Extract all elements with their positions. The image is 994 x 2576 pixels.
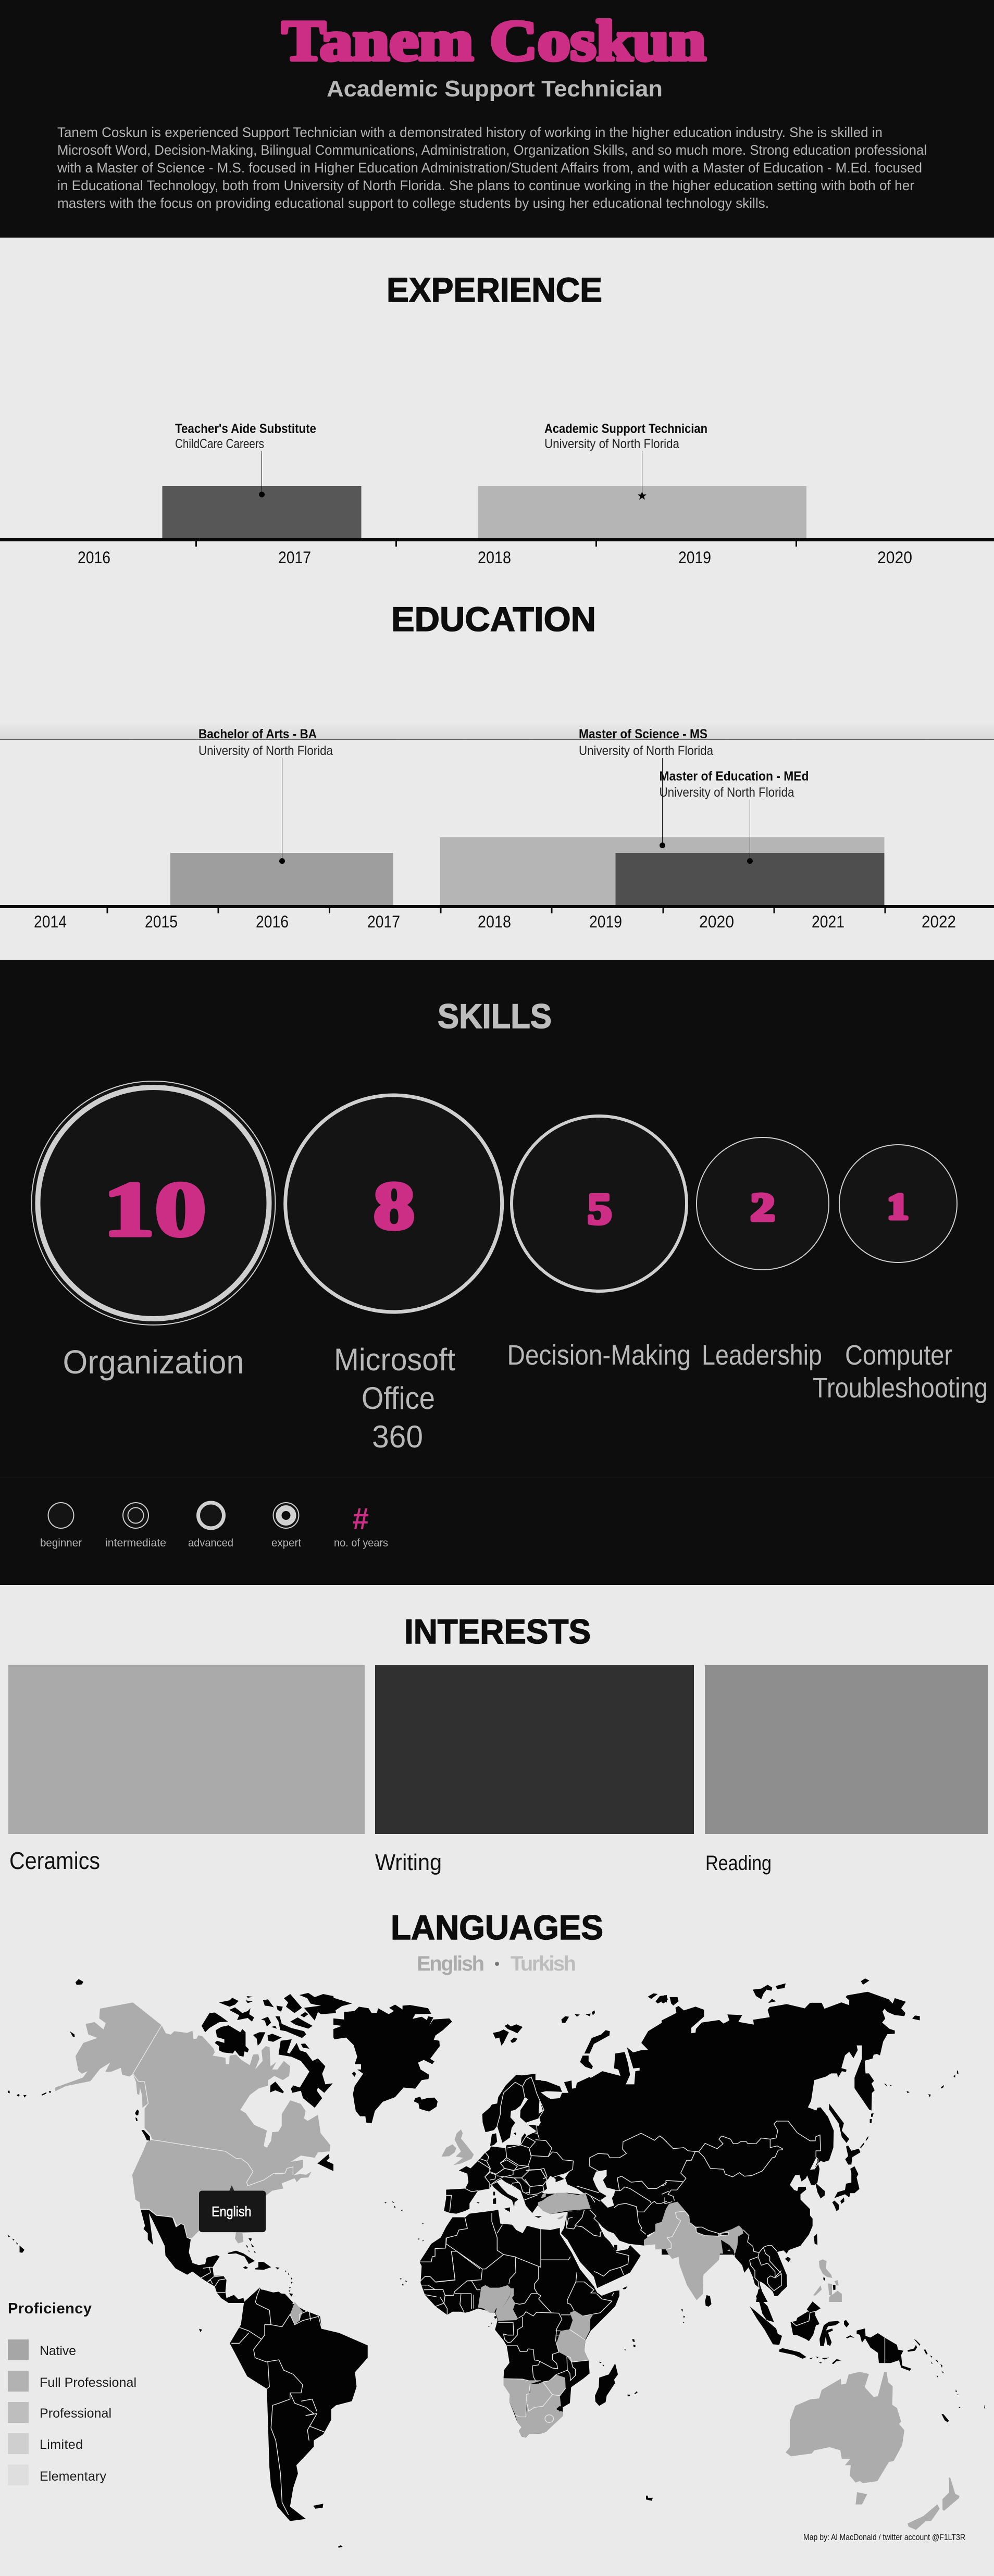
swatch: limited	[8, 2433, 83, 2454]
biography text block: with a Master of Science - M.S. focused in Higher Education Administration/Student Affairs from, and with a Master of Education - M.Ed. focused	[57, 160, 922, 176]
map layer: highlighted countries and borders, eurasia and africa	[419, 2077, 842, 2437]
biography text block: Microsoft Word, Decision-Making, Bilingual Communications, Administration, Organization Skills, and so much more. Strong education professional	[57, 142, 927, 158]
swatch: professional: Professional	[40, 2406, 111, 2421]
annotation: bachelor of arts: Bachelor of Arts - BA	[198, 727, 317, 741]
skill: organization	[31, 1081, 275, 1381]
annotation: teacher's aide: ChildCare Careers	[175, 437, 264, 451]
panel: education	[0, 600, 994, 931]
timeline axis: 2021	[812, 912, 844, 931]
timeline axis: 2019	[589, 912, 622, 931]
annotation: master of science: University of North Florida	[579, 744, 713, 758]
map region: greenland, europe and western asia	[331, 1993, 668, 2288]
icon: advanced: advanced	[188, 1537, 233, 1549]
skill: decision-making: 5	[588, 1185, 612, 1233]
skill: microsoft office 360: 360	[372, 1419, 423, 1454]
panel: languages	[8, 1908, 985, 2548]
bar: master of education	[616, 853, 885, 905]
timeline axis: 2017	[278, 548, 311, 567]
skill: microsoft office 360: Microsoft	[334, 1342, 455, 1377]
annotation: teacher's aide	[175, 422, 316, 497]
shaded divider	[0, 722, 994, 740]
timeline axis	[0, 538, 994, 567]
interest: writing	[375, 1665, 694, 1875]
timeline axis	[0, 905, 994, 931]
map region: north america	[8, 1979, 336, 2303]
skill: organization: 10	[103, 1166, 206, 1253]
proficiency legend	[8, 2300, 136, 2485]
heading: interests: INTERESTS	[404, 1612, 591, 1651]
map credit: Map by: Al MacDonald / twitter account @F1LT3R	[803, 2532, 965, 2542]
swatch: full professional	[8, 2371, 136, 2392]
timeline axis: 2014	[34, 912, 67, 931]
icon: beginner	[40, 1503, 82, 1549]
language list	[417, 1952, 576, 1975]
map region: east asia	[662, 1978, 959, 2302]
icon: number of years	[334, 1502, 388, 1549]
timeline axis: 2016	[78, 548, 110, 567]
skill: computer troubleshooting	[813, 1145, 988, 1404]
heading: experience: EXPERIENCE	[387, 270, 602, 309]
interest: reading: Reading	[705, 1852, 772, 1875]
annotation: master of education: University of North Florida	[660, 785, 794, 800]
icon: beginner: beginner	[40, 1537, 82, 1549]
swatch: limited: Limited	[40, 2437, 83, 2452]
annotation: academic support technician	[544, 422, 707, 500]
interest: ceramics	[8, 1665, 365, 1874]
annotation: bachelor of arts: University of North Florida	[198, 744, 333, 758]
annotation: master of science	[579, 727, 713, 848]
panel: experience	[0, 270, 994, 567]
skill: decision-making	[507, 1116, 691, 1371]
icon: expert	[271, 1503, 301, 1549]
icon: intermediate: intermediate	[105, 1537, 166, 1549]
proficiency legend: Proficiency	[8, 2300, 92, 2317]
map region: oceania and maritime asia	[681, 2290, 985, 2530]
map tooltip: English	[199, 2185, 266, 2232]
biography text block: in Educational Technology, both from University of North Florida. She plans to continue working in the higher education setting with both of her	[57, 178, 914, 193]
swatch: native	[8, 2339, 76, 2360]
swatch: native: Native	[40, 2344, 76, 2358]
interest: ceramics: Ceramics	[9, 1847, 100, 1874]
panel: interests	[8, 1612, 988, 1875]
annotation: bachelor of arts	[198, 727, 333, 864]
panel: header	[0, 0, 994, 238]
skill: microsoft office 360: Office	[362, 1381, 435, 1416]
title: Tanem Coskun	[282, 9, 706, 72]
timeline axis: 2016	[256, 912, 289, 931]
world map	[8, 1978, 985, 2548]
panel: skills	[0, 960, 994, 1585]
timeline axis: 2015	[145, 912, 178, 931]
icon: expert: expert	[271, 1537, 301, 1549]
skill: microsoft office 360	[285, 1095, 502, 1454]
annotation: teacher's aide: Teacher's Aide Substitute	[175, 422, 316, 436]
swatch: full professional: Full Professional	[40, 2375, 136, 2390]
icon: advanced	[188, 1503, 233, 1549]
map region: africa	[338, 2210, 653, 2548]
swatch: elementary	[8, 2464, 106, 2485]
biography text block	[57, 125, 927, 211]
timeline axis: 2018	[478, 548, 511, 567]
timeline axis: 2017	[367, 912, 400, 931]
interest: reading	[705, 1665, 988, 1875]
skill: computer troubleshooting: 1	[887, 1187, 909, 1227]
skill: microsoft office 360: 8	[374, 1168, 415, 1244]
map region: south america	[199, 2287, 368, 2521]
annotation: academic support technician: Academic Support Technician	[544, 422, 707, 436]
bar: academic support technician	[478, 486, 806, 538]
biography text block: Tanem Coskun is experienced Support Technician with a demonstrated history of working in the higher education industry. She is skilled in	[57, 125, 883, 140]
skill: leadership	[697, 1137, 829, 1371]
legend: skill levels	[40, 1502, 388, 1549]
subtitle: Academic Support Technician	[327, 76, 663, 102]
heading: skills: SKILLS	[438, 997, 552, 1035]
icon: intermediate	[105, 1503, 166, 1549]
skill: leadership: 2	[751, 1186, 775, 1229]
timeline axis: 2020	[877, 548, 912, 567]
timeline axis: 2020	[699, 912, 734, 931]
heading: education: EDUCATION	[391, 600, 596, 638]
map tooltip: English: English	[212, 2203, 251, 2219]
bar: bachelor of arts	[170, 853, 393, 905]
heading: languages: LANGUAGES	[391, 1908, 603, 1947]
language list: Turkish	[511, 1952, 576, 1975]
icon: number of years: no. of years	[334, 1537, 388, 1549]
biography text block: masters with the focus on providing educational support to college students by using her educational technology skills.	[57, 195, 769, 211]
annotation: academic support technician: University of North Florida	[544, 437, 679, 451]
swatch: professional	[8, 2402, 111, 2423]
skill: computer troubleshooting: Computer	[845, 1340, 952, 1371]
timeline axis: 2018	[478, 912, 511, 931]
skill: organization: Organization	[63, 1343, 244, 1381]
skill: leadership: Leadership	[702, 1340, 822, 1371]
seas cut out of land	[424, 2065, 615, 2208]
annotation: master of education: Master of Education - MEd	[660, 769, 809, 784]
interest: writing: Writing	[375, 1850, 442, 1875]
timeline axis: 2022	[922, 912, 956, 931]
bar: master of science	[440, 837, 885, 905]
bar: teacher's aide substitute	[163, 486, 362, 538]
timeline axis: 2019	[678, 548, 711, 567]
annotation: master of education	[660, 769, 809, 864]
icon: number of years: #	[353, 1502, 369, 1536]
language list: English	[417, 1952, 484, 1975]
annotation: master of science: Master of Science - MS	[579, 727, 707, 741]
swatch: elementary: Elementary	[40, 2469, 106, 2484]
skill: decision-making: Decision-Making	[507, 1340, 691, 1371]
